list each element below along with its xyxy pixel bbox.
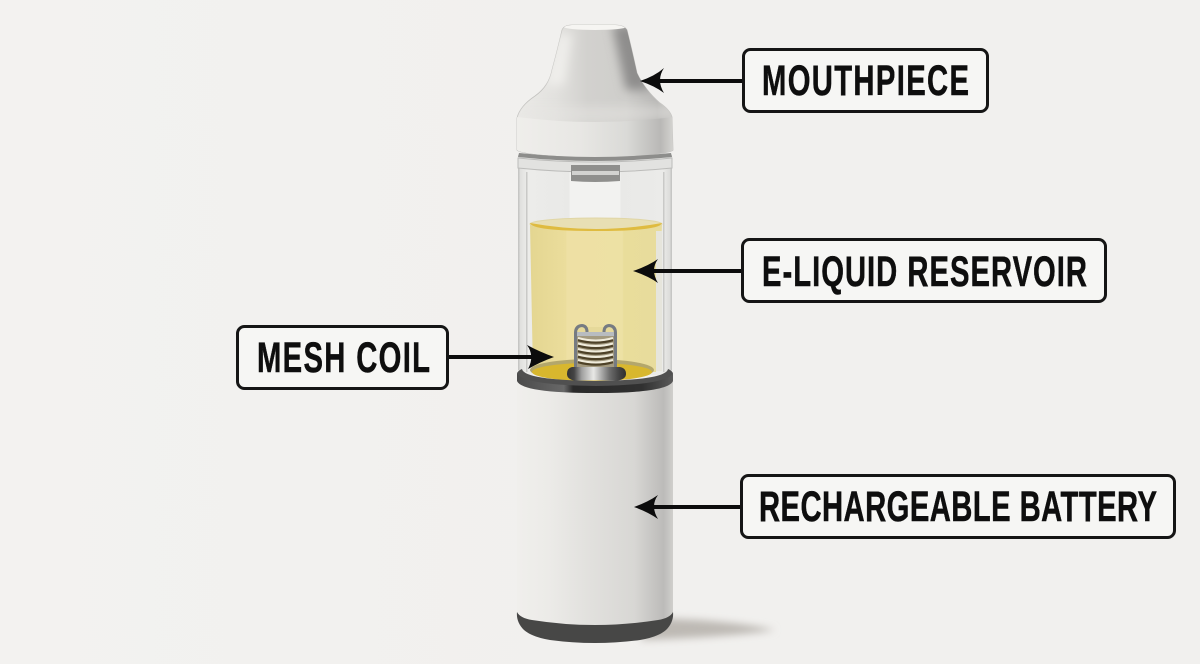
collar <box>518 158 672 172</box>
dark ring <box>517 369 673 393</box>
glass reservoir <box>518 155 672 375</box>
label: mouthpiece: MOUTHPIECE <box>762 56 969 104</box>
device: vape cartridge illustration <box>517 24 673 643</box>
e-liquid <box>530 218 662 372</box>
collar tab <box>571 165 620 182</box>
shadow under device <box>640 618 775 640</box>
label: mesh coil <box>238 326 448 388</box>
battery body <box>517 380 673 643</box>
arrow: mesh coil <box>448 345 554 369</box>
pool at base <box>530 359 654 381</box>
label: mouthpiece <box>744 50 988 112</box>
arrow: mouthpiece <box>640 68 743 93</box>
label: e-liquid reservoir <box>742 240 1106 302</box>
label: e-liquid reservoir: E-LIQUID RESERVOIR <box>762 247 1087 295</box>
mouthpiece <box>517 24 673 161</box>
label: rechargeable battery: RECHARGEABLE BATTERY <box>759 482 1157 530</box>
coil base <box>567 367 626 380</box>
label: mesh coil: MESH COIL <box>257 333 430 381</box>
arrow: rechargeable battery <box>634 495 741 519</box>
mesh coil <box>567 326 626 380</box>
arrow: e-liquid reservoir <box>633 259 742 283</box>
